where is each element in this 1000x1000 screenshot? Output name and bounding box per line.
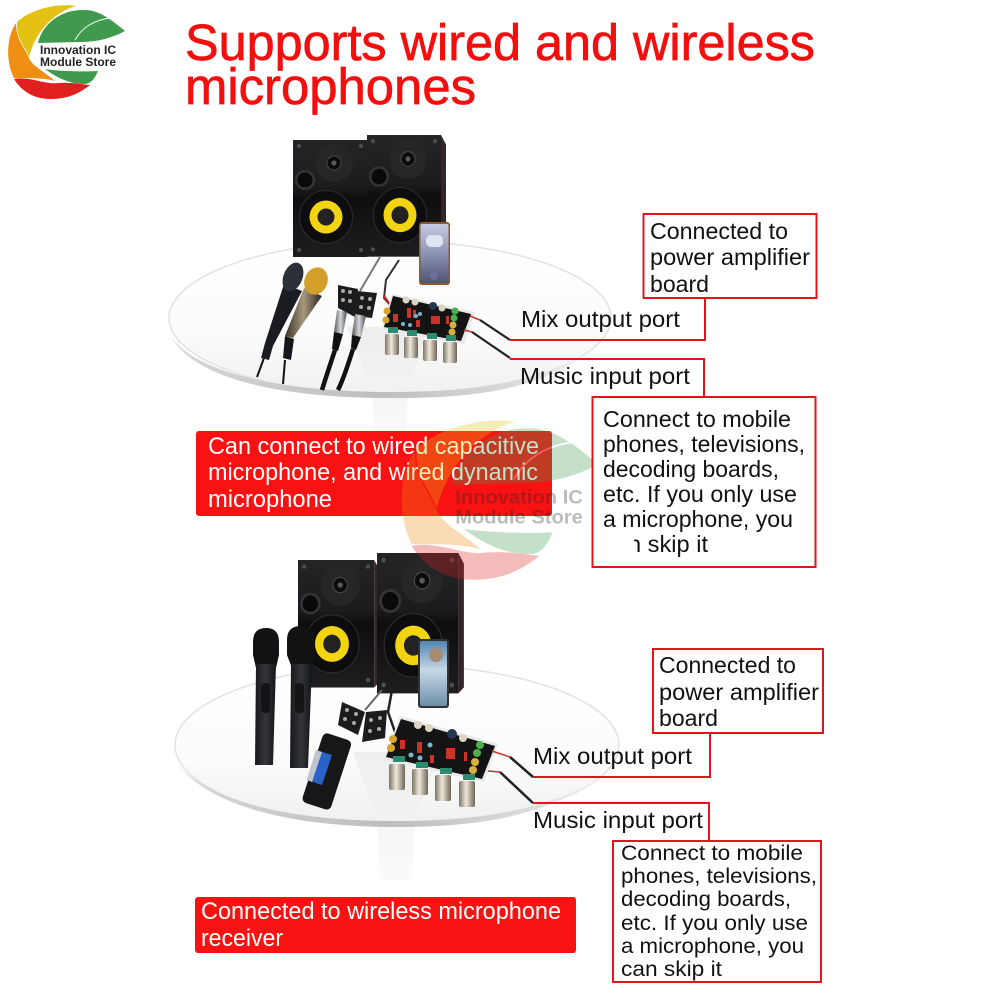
icon: jack connectors (322, 285, 377, 390)
callout: bottom connect to mobile phones: can skip it (621, 957, 722, 981)
callout: top mix output port (510, 298, 705, 340)
banner: wireless receiver: receiver (201, 925, 283, 952)
callout: bottom power amplifier: power amplifier (659, 679, 819, 705)
callout: bottom music input port (533, 803, 709, 841)
callout: top connect to mobile phones (592, 397, 816, 567)
banner: wired microphones: microphone (208, 486, 332, 513)
title: microphones (185, 58, 476, 115)
speakers (293, 140, 372, 257)
callout: top connect to mobile phones: Connect to mobile (603, 406, 791, 432)
callout: top connect to mobile phones: can skip it (603, 531, 709, 557)
callout: top mix output port: Mix output port (521, 306, 681, 332)
icon: wired microphone black (257, 260, 307, 377)
callout: bottom connect to mobile phones: etc. If you only use (621, 911, 808, 935)
callout: top connect to mobile phones: decoding boards, (603, 456, 779, 482)
scene: wireless microphones on table (175, 553, 619, 880)
callout: bottom power amplifier: board (659, 705, 718, 731)
callout: bottom mix output port (533, 733, 710, 777)
callout: bottom power amplifier: Connected to (659, 652, 796, 678)
table pedestal (353, 752, 440, 880)
banner: wired microphones (196, 431, 552, 516)
callout: top connect to mobile phones: a microphone, you (603, 506, 793, 532)
banner: wireless receiver: Connected to wireless microphone (201, 898, 561, 925)
speakers (298, 560, 379, 688)
watermark logo: Innovation IC (455, 486, 583, 508)
table top (175, 665, 619, 825)
callout: top power amplifier (644, 214, 816, 298)
table top (169, 241, 611, 395)
callout: top music input port (510, 359, 704, 397)
speaker cables (360, 257, 380, 291)
callout: bottom power amplifier (653, 649, 823, 733)
circuit board (384, 716, 533, 807)
callout: bottom connect to mobile phones: a microphone, you (621, 934, 804, 958)
speaker cables (365, 690, 382, 710)
icon: wireless microphone 1 (253, 628, 279, 765)
table edge (178, 765, 600, 827)
title: Supports wired and wireless (185, 14, 815, 71)
callout: top connect to mobile phones: phones, televisions, (603, 431, 805, 457)
callout: top connect to mobile phones: etc. If you only use (603, 481, 797, 507)
icon: phone (419, 222, 450, 285)
scene: wired microphones on table (169, 135, 611, 431)
callout: bottom connect to mobile phones (613, 841, 821, 982)
banner: wired microphones: Can connect to wired capacitive (208, 433, 539, 460)
table pedestal (347, 327, 428, 431)
icon: wireless microphone 2 (287, 626, 315, 768)
icon: jack connectors (338, 702, 387, 742)
callout: bottom music input port: Music input port (533, 807, 704, 833)
callout: bottom connect to mobile phones: Connect to mobile (621, 841, 803, 865)
callout: top music input port: Music input port (520, 363, 691, 389)
logo: Module Store (40, 57, 116, 69)
icon: wired microphone gold (283, 264, 332, 384)
icon: wireless receiver (301, 732, 352, 811)
circuit board (382, 294, 510, 363)
table edge (170, 335, 590, 398)
callout: bottom mix output port: Mix output port (533, 743, 693, 769)
callout: bottom connect to mobile phones: decoding boards, (621, 887, 791, 911)
watermark logo: Module Store (455, 507, 583, 529)
callout: top power amplifier: power amplifier (650, 244, 810, 270)
callout: top power amplifier: Connected to (650, 218, 788, 244)
watermark logo (402, 421, 598, 580)
icon: phone (418, 639, 449, 708)
white patch over text (600, 532, 634, 558)
title (185, 14, 815, 115)
callout: bottom connect to mobile phones: phones, televisions, (621, 864, 817, 888)
callout: top power amplifier: board (650, 271, 709, 297)
logo (8, 5, 125, 99)
logo: Innovation IC (40, 45, 116, 57)
banner: wired microphones: microphone, and wired dynamic (208, 459, 538, 486)
banner: wireless receiver (195, 897, 576, 953)
